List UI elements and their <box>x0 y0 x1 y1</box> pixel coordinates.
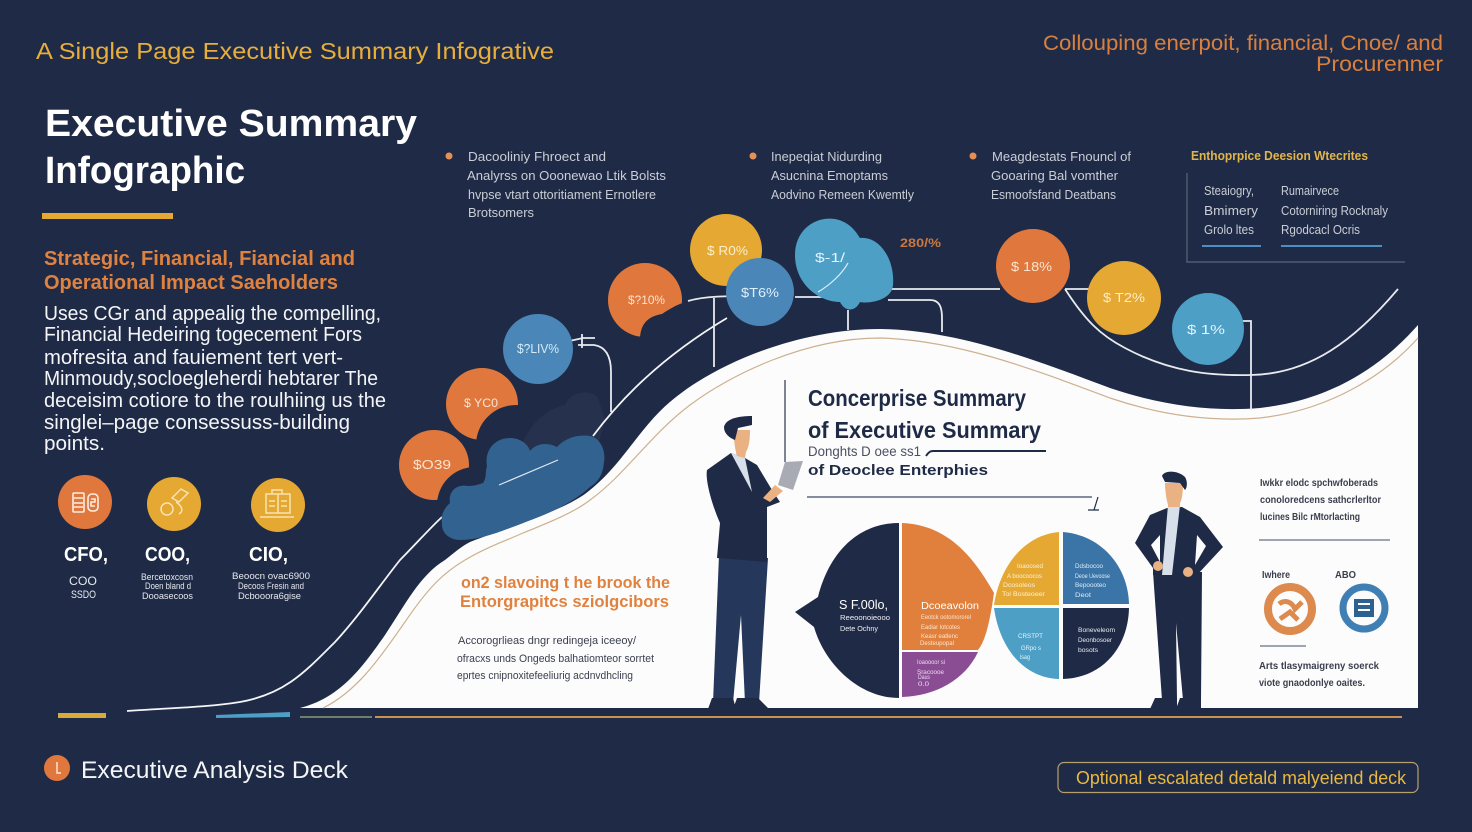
pie chart: budget allocation: Reeoonoieooo <box>840 615 890 622</box>
top bullet column 2: Inepeqiat Nidurding <box>771 149 882 164</box>
pie chart: budget allocation: Ioaoosed <box>1017 563 1043 570</box>
icon: orange ring: Iwhere <box>1262 570 1290 581</box>
stakeholder: CFO: SSDO <box>71 589 96 601</box>
pie chart: budget allocation: Bepoooteo <box>1075 582 1106 589</box>
panel heading: of Executive Summary <box>808 417 1041 443</box>
pie chart: budget allocation: Ddsbocoo <box>1075 563 1103 570</box>
intro body text: Uses CGr and appealig the compelling, <box>44 303 381 325</box>
intro body text: mofresita and fauiement tert vert- <box>44 347 343 369</box>
header: right audience line: Collouping enerpoit, financial, Cnoe/ and <box>1043 32 1443 55</box>
blue node: S1LV%: $?LIV% <box>517 341 559 356</box>
pie chart: budget allocation: Dcoeavolon <box>921 601 979 612</box>
stakeholder: COO: COO, <box>145 544 190 566</box>
pie chart: budget allocation: Deonbosoer <box>1078 637 1113 644</box>
yellow node: S80% <box>690 214 762 286</box>
top bullet column 3: Esmoofsfand Deatbans <box>991 187 1116 202</box>
icon: blue ring <box>1335 570 1385 629</box>
growth curve line <box>127 318 727 711</box>
top bullet column 1 <box>446 149 666 220</box>
stakeholder: COO <box>141 477 201 601</box>
pie chart: budget allocation: GRpo s <box>1021 645 1042 652</box>
title accent bar <box>42 213 173 219</box>
blue blob node: S1/%: $-1/ <box>815 250 846 265</box>
pie chart: budget allocation: Daus <box>918 674 931 681</box>
pie chart: budget allocation: A boocoocos <box>1007 573 1043 580</box>
panel contour line <box>323 338 1418 708</box>
stakeholder: CIO: CIO, <box>249 544 288 566</box>
pie chart: budget allocation <box>795 523 1129 698</box>
orange node: S18%: $ 18% <box>1011 259 1052 274</box>
panel: enterprise decision metrics: Bmimery <box>1204 204 1259 218</box>
left panel callout heading: Entorgrapitcs sziolgcibors <box>460 592 669 611</box>
pie chart: budget allocation: Deoe Uevoose <box>1075 573 1110 580</box>
blue node: S1LV% <box>503 314 573 384</box>
panel: enterprise decision metrics: Rgodcacl Ocris <box>1281 223 1360 237</box>
blue node: S16% <box>726 258 794 326</box>
pie chart: budget allocation: CRSTPT <box>1018 633 1043 640</box>
blue cloud <box>442 435 604 540</box>
panel heading: of Deoclee Enterphies <box>808 462 988 479</box>
pie chart: budget allocation: Boneveleom <box>1078 627 1115 634</box>
pie chart: budget allocation: Tol Bosteoeer <box>1002 591 1046 598</box>
intro body text: Minmoudy,socloegleherdi hebtarer The <box>44 368 378 390</box>
stakeholder: CFO: COO <box>69 574 97 588</box>
pie chart: budget allocation: bosots <box>1078 647 1099 654</box>
right panel bottom text: viote gnaodonlye oaites. <box>1259 677 1365 689</box>
subheading <box>44 248 355 294</box>
yellow node: S12% <box>1087 261 1161 335</box>
figure: executive with tablet <box>707 416 803 709</box>
top bullet column 2 <box>750 149 914 202</box>
main title: Executive Summary <box>45 103 417 145</box>
stakeholder: CFO <box>58 475 112 601</box>
right panel top text: Iwkkr elodc spchwfoberads <box>1260 477 1378 489</box>
left panel callout text: eprtes cnipnoxitefeeliurig acdnvdhcling <box>457 670 633 682</box>
yellow node: S80%: $ R0% <box>707 243 748 258</box>
top bullet column 1: Brotsomers <box>468 205 534 220</box>
right panel top text: lucines Bilc rMtorlacting <box>1260 511 1360 523</box>
panel heading <box>808 385 1041 479</box>
panel: enterprise decision metrics: Steaiogry, <box>1204 184 1254 198</box>
yellow node: S12%: $ T2% <box>1103 290 1145 305</box>
pie chart: budget allocation: Deot <box>1075 592 1091 599</box>
intro body text: deceisim cotiore to the roulhiing us the <box>44 390 386 412</box>
stakeholder: COO: Bercetoxcosn <box>141 572 193 582</box>
stakeholder: COO: Doen bland d <box>145 581 191 591</box>
pie chart: budget allocation: Eadiar lotcotes <box>921 624 961 631</box>
left panel callout heading: on2 slavoing t he brook the <box>461 573 670 592</box>
orange node: S700 <box>446 368 556 485</box>
pie chart: budget allocation: Dete Ochny <box>840 626 879 633</box>
pie chart: budget allocation: Eeotck ootomororel <box>921 614 971 621</box>
figure: executive hands on hips <box>1135 472 1223 709</box>
footer: optional deck callout: Optional escalated detald malyeiend deck <box>1076 768 1407 788</box>
panel: enterprise decision metrics: Enthoprpice Deesion Wtecrites <box>1191 148 1368 163</box>
smoke cloud backdrop <box>520 392 605 455</box>
top bullet column 1: hvpse vtart ottoritiament Ernotlere <box>468 187 656 202</box>
intro body text: singlei–page consessuss-building <box>44 412 350 434</box>
stakeholder: COO: Dooasecoos <box>142 591 193 601</box>
panel: enterprise decision metrics: Cotorniring Rocknaly <box>1281 204 1389 218</box>
right panel rules <box>1259 540 1390 646</box>
intro body text: points. <box>44 433 105 455</box>
white curved panel <box>300 325 1418 708</box>
orange node: S18% <box>996 229 1070 303</box>
orange node: S700: $ YC0 <box>464 396 498 410</box>
footer: deck label: Executive Analysis Deck <box>81 757 349 784</box>
top bullet column 3: Meagdestats Fnouncl of <box>992 149 1131 164</box>
top bullet column 1: Dacooliniy Fhroect and <box>468 149 606 164</box>
left panel callout text: Accorogrlieas dngr redingeja iceeoy/ <box>458 635 637 647</box>
header: right audience line <box>1043 32 1443 76</box>
header: right audience line: Procurenner <box>1316 53 1443 76</box>
pie chart: budget allocation: 0.0 <box>918 681 929 688</box>
value label 280%: 280/% <box>900 236 941 250</box>
panel heading: Concerprise Summary <box>808 385 1026 411</box>
right panel top text <box>1260 477 1381 523</box>
main title <box>45 103 417 192</box>
blue node: S11%: $ 1% <box>1187 322 1226 337</box>
pie chart: budget allocation: S F.00lo, <box>839 597 888 612</box>
heading rules <box>785 380 1099 510</box>
subheading: Operational Impact Saeholders <box>44 272 338 294</box>
baseline bars <box>58 712 1402 718</box>
orange node: S309 <box>399 430 513 543</box>
stakeholder: CIO: Beoocn ovac6900 <box>232 571 310 581</box>
top bullet column 2: Asucnina Emoptams <box>771 168 888 183</box>
blue node: S11% <box>1172 293 1244 365</box>
connector lines <box>565 289 1398 412</box>
panel heading: Donghts D oee ss1 <box>808 443 921 459</box>
pie chart: budget allocation: Keasr eatlenc <box>921 633 959 640</box>
right panel bottom text <box>1259 660 1379 689</box>
header: left tagline: A Single Page Executive Summary Infogrative <box>36 38 554 64</box>
intro body text: Financial Hedeiring togecement Fors <box>44 324 362 346</box>
blue node: S16%: $T6% <box>741 285 779 300</box>
panel: enterprise decision metrics: Grolo ltes <box>1204 223 1254 237</box>
left panel callout text <box>457 635 654 682</box>
top bullet column 3 <box>970 149 1131 202</box>
panel: enterprise decision metrics <box>1187 148 1405 262</box>
right panel bottom text: Arts tlasymaigreny soerck <box>1259 660 1379 672</box>
right panel top text: conoloredcens sathcrlerltor <box>1260 494 1381 506</box>
orange node: S10%: $?10% <box>628 293 665 307</box>
pie chart: budget allocation: Desteupopal <box>920 640 955 647</box>
top bullet column 3: Gooaring Bal vomther <box>991 168 1119 183</box>
stakeholder: CIO: Decoos Fresin and <box>238 581 304 591</box>
subheading: Strategic, Financial, Fiancial and <box>44 248 355 270</box>
pie chart: budget allocation: Dcosoleos <box>1003 582 1036 589</box>
main title: Infographic <box>45 150 245 192</box>
pie chart: budget allocation: Sracoooe <box>917 669 944 676</box>
pie chart: budget allocation: lsag <box>1020 654 1030 661</box>
footer: optional deck callout <box>1058 762 1418 792</box>
icon: orange ring <box>1262 570 1312 631</box>
intro body text <box>44 303 386 455</box>
orange node: S309: $O39 <box>413 457 451 472</box>
left panel callout text: ofracxs unds Ongeds balhatiomteor sorrtet <box>457 653 654 665</box>
top bullet column 2: Aodvino Remeen Kwemtly <box>771 187 914 202</box>
panel: enterprise decision metrics: Rumairvece <box>1281 184 1339 198</box>
stakeholder: CIO: Dcbooora6gise <box>238 591 301 601</box>
stakeholder: CFO: CFO, <box>64 544 108 566</box>
blue blob node: S1/% <box>795 219 893 310</box>
top bullet column 1: Analyrss on Ooonewao Ltik Bolsts <box>467 168 666 183</box>
orange node: S10% <box>608 263 700 345</box>
pie chart: budget allocation: Ioaoooor si <box>917 659 945 666</box>
left panel callout heading <box>460 573 670 611</box>
icon: blue ring: ABO <box>1335 570 1356 581</box>
stakeholder: CIO <box>232 478 310 601</box>
